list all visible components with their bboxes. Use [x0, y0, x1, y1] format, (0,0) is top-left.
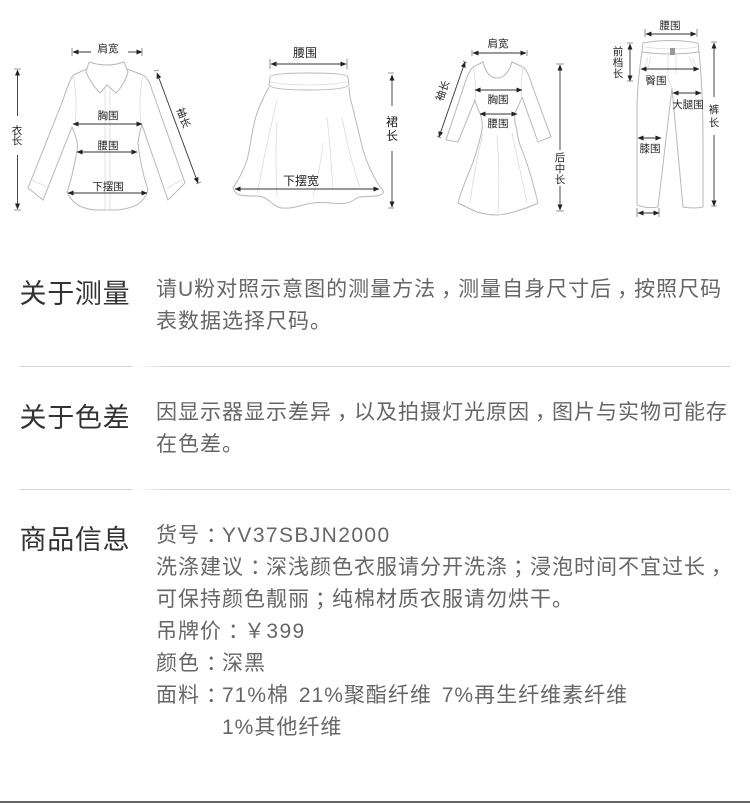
labels: dress: 胸围 [488, 93, 508, 106]
text: product details: 颜色 ：深黑 [156, 652, 266, 675]
labels: dress: 腰围 [488, 118, 508, 130]
text: product details: 洗涤建议 ：深浅颜色衣服请分开洗涤；浸泡时间不宜过长， [156, 556, 733, 579]
labels: trousers: 裤 [709, 103, 719, 116]
labels: shirt: 袖长 [174, 106, 193, 130]
labels: dress: 长 [555, 174, 566, 186]
labels: shirt [12, 42, 193, 193]
text: colour difference: 在色差。 [156, 433, 244, 456]
labels: dress: 肩宽 [488, 37, 509, 50]
text: colour difference [156, 401, 728, 456]
section: colour difference [20, 401, 728, 456]
labels: trousers: 档 [613, 56, 623, 69]
labels: trousers: 臀围 [646, 75, 666, 87]
text: measurement [156, 278, 722, 333]
section: product information [20, 524, 733, 739]
labels: skirt: 腰围 [293, 46, 317, 60]
diagram: shirt [12, 42, 201, 210]
text: product details: 可保持颜色靓丽；纯棉材质衣服请勿烘干。 [156, 588, 574, 611]
labels: skirt: 裙 [386, 115, 398, 129]
text: product details: 吊牌价 ：￥399 [156, 620, 306, 643]
labels: skirt: 下摆宽 [283, 173, 319, 188]
labels: shirt: 腰围 [98, 140, 118, 152]
dimension arrows: skirt [235, 59, 394, 208]
dimension arrows: dress [437, 50, 564, 211]
labels: dress: 后 [555, 152, 565, 164]
labels: skirt [283, 46, 398, 188]
labels: trousers: 腰围 [660, 20, 680, 32]
text: product details: 1%其他纤维 [222, 716, 342, 739]
text: product details: 面料 ：71%棉 21%聚酯纤维 7%再生纤维素纤维 [156, 684, 628, 707]
labels: trousers: 大腿围 [672, 98, 704, 111]
dimension arrows: trousers [627, 29, 717, 217]
heading: colour difference: 关于色差 [20, 403, 130, 433]
text: product details: 货号 ：YV37SBJN2000 [156, 524, 391, 547]
labels: shirt: 下摆围 [92, 180, 124, 193]
labels: skirt: 长 [386, 129, 398, 143]
diagram: skirt [233, 46, 398, 208]
labels: dress: 中 [555, 162, 565, 175]
diagram: trousers [613, 20, 720, 217]
section: measurement [20, 278, 722, 333]
labels: dress: 袖长 [433, 78, 453, 103]
labels: dress [433, 37, 566, 186]
labels: trousers: 长 [709, 117, 720, 129]
labels: trousers: 前 [613, 45, 623, 58]
heading: product information: 商品信息 [20, 525, 130, 555]
labels: trousers [613, 20, 720, 155]
text: measurement: 请U粉对照示意图的测量方法，测量自身尺寸后，按照尺码 [156, 278, 722, 301]
labels: shirt: 胸围 [98, 109, 118, 122]
labels: shirt: 长 [12, 135, 23, 147]
labels: trousers: 膝围 [640, 142, 660, 155]
labels: shirt: 肩宽 [98, 42, 119, 55]
measurement diagrams [12, 20, 720, 217]
dimension arrows: shirt [14, 48, 201, 210]
text: product details [156, 524, 733, 739]
text: colour difference: 因显示器显示差异，以及拍摄灯光原因，图片与实物可能存 [156, 401, 728, 424]
labels: shirt: 衣 [12, 124, 23, 137]
text: measurement: 表数据选择尺码。 [156, 310, 332, 333]
heading: measurement: 关于测量 [20, 279, 130, 309]
diagram: dress [433, 37, 566, 215]
labels: trousers: 长 [613, 68, 624, 80]
